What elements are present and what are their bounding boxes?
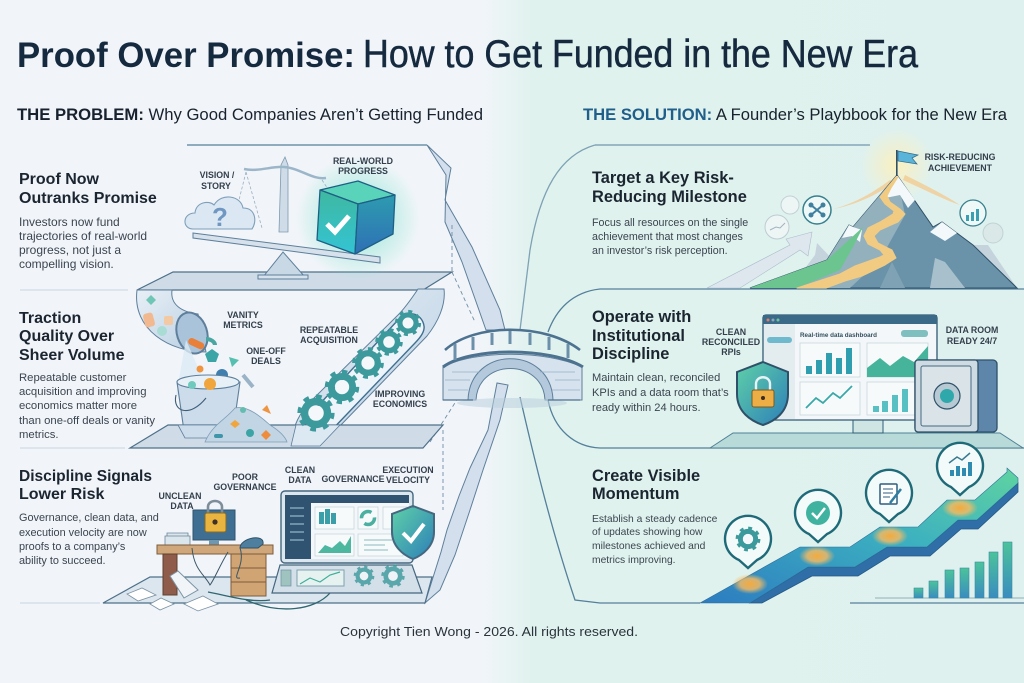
illustration: clean laptop dashboard: DATA: [288, 475, 312, 485]
panel text: discipline signals: Discipline Signals: [19, 468, 152, 485]
panel text: traction quality: Quality Over: [19, 328, 114, 345]
illustration: balance scale: VISION /: [200, 170, 235, 180]
title: Proof Over Promise:: [17, 36, 355, 75]
panel text: discipline signals: proofs to a company’s: [19, 541, 126, 553]
illustration: leaky pipe and bucket: ONE-OFF: [246, 346, 286, 356]
platform 3: [103, 577, 432, 603]
illustration: leaky pipe and bucket: DEALS: [251, 356, 281, 366]
illustration: dashboard and safe: READY 24/7: [947, 336, 997, 346]
panel text: traction quality: economics matter more: [19, 400, 137, 412]
panel text: discipline signals: [19, 468, 159, 567]
panel text: traction quality: Traction: [19, 310, 81, 327]
panel text: proof now outranks promise: [19, 171, 157, 271]
copyright: Copyright Tien Wong - 2026. All rights reserved.: [340, 624, 638, 639]
illustration: clean laptop dashboard: EXECUTION: [382, 465, 434, 475]
panel text: traction quality: [19, 310, 155, 441]
panel text: target a key milestone: an investor’s risk perception.: [592, 245, 728, 257]
illustration: balance scale: [185, 156, 420, 280]
panel text: visible momentum: Momentum: [592, 485, 679, 503]
illustration: conveyor of gears: ECONOMICS: [373, 399, 427, 409]
illustration: conveyor of gears: REPEATABLE: [300, 325, 358, 335]
panel text: traction quality: metrics.: [19, 429, 59, 441]
illustration: balance scale: STORY: [201, 181, 231, 191]
illustration: clean laptop dashboard: [272, 465, 434, 593]
illustration: clean laptop dashboard: GOVERNANCE: [321, 474, 385, 484]
illustration: messy desk: POOR: [232, 472, 259, 482]
panel text: institutional discipline: Maintain clean, reconciled: [592, 372, 720, 384]
panel text: target a key milestone: [592, 169, 748, 257]
panel text: institutional discipline: KPIs and a data room that’s: [592, 387, 729, 399]
illustration: conveyor of gears: ACQUISITION: [300, 335, 358, 345]
panel text: institutional discipline: Operate with: [592, 308, 691, 326]
panel text: proof now outranks promise: Investors now fund: [19, 215, 120, 229]
illustration: mountain milestone: [707, 129, 1017, 288]
frame: right structure: [520, 145, 1024, 603]
illustration: conveyor of gears: IMPROVING: [375, 389, 425, 399]
platform 2 with debris pile: [130, 397, 443, 448]
illustration: balance scale: PROGRESS: [338, 166, 388, 176]
panel text: traction quality: Sheer Volume: [19, 347, 125, 364]
panel text: visible momentum: Create Visible: [592, 467, 700, 485]
panel text: proof now outranks promise: Proof Now: [19, 171, 100, 188]
panel text: traction quality: Repeatable customer: [19, 372, 127, 384]
illustration: leaky pipe and bucket: [137, 290, 286, 438]
panel text: proof now outranks promise: Outranks Promise: [19, 190, 157, 207]
panel text: traction quality: than one-off deals or vanity: [19, 415, 155, 427]
illustration: dashboard and safe: Real-time data dashboard: [800, 332, 877, 339]
illustration: balance scale: REAL-WORLD: [333, 156, 393, 166]
illustration: messy desk: GOVERNANCE: [213, 482, 277, 492]
heading: the problem: THE PROBLEM: Why Good Companies Aren’t Getting Funded: [17, 106, 483, 124]
illustration: conveyor of gears: [290, 289, 444, 446]
illustration: dashboard and safe: DATA ROOM: [946, 325, 998, 335]
illustration: dashboard and safe: [702, 315, 1023, 448]
illustration: dashboard and safe: CLEAN: [716, 327, 746, 337]
illustration: leaky pipe and bucket: VANITY: [227, 310, 259, 320]
panel text: discipline signals: execution velocity are now: [19, 527, 147, 539]
illustration: dashboard and safe: RECONCILED: [702, 337, 760, 347]
illustration: mountain milestone: ACHIEVEMENT: [928, 163, 993, 173]
illustration: messy desk: DATA: [170, 501, 194, 511]
panel text: institutional discipline: ready within 24 hours.: [592, 402, 701, 414]
illustration: clean laptop dashboard: CLEAN: [285, 465, 315, 475]
panel text: institutional discipline: Institutional: [592, 327, 685, 345]
illustration: momentum path: [700, 443, 1024, 603]
illustration: balance scale: ?: [212, 202, 228, 232]
illustration: clean laptop dashboard: VELOCITY: [386, 475, 430, 485]
panel text: discipline signals: Lower Risk: [19, 486, 104, 503]
panel text: proof now outranks promise: progress, not just a: [19, 243, 121, 257]
illustration: messy desk: UNCLEAN: [158, 491, 202, 501]
panel text: discipline signals: Governance, clean data, and: [19, 512, 159, 524]
panel text: visible momentum: Establish a steady cadence: [592, 514, 718, 525]
frame: left structure: [20, 145, 508, 603]
panel text: traction quality: acquisition and improving: [19, 386, 146, 398]
panel text: target a key milestone: Focus all resources on the single: [592, 217, 748, 229]
panel text: visible momentum: milestones achieved and: [592, 541, 706, 552]
title continuation: How to Get Funded in the New Era: [363, 33, 918, 76]
panel text: institutional discipline: Discipline: [592, 345, 669, 363]
illustration: leaky pipe and bucket: METRICS: [223, 320, 263, 330]
panel text: proof now outranks promise: trajectories of real-world: [19, 229, 147, 243]
heading: the solution: THE SOLUTION: A Founder’s Playbbook for the New Era: [583, 106, 1008, 124]
platform 1: [137, 272, 452, 290]
panel text: visible momentum: [592, 467, 718, 566]
panel text: discipline signals: ability to succeed.: [19, 555, 106, 567]
panel text: visible momentum: of updates showing how: [592, 527, 703, 538]
illustration: mountain milestone: RISK-REDUCING: [925, 152, 996, 162]
illustration: messy desk: [127, 472, 330, 611]
illustration: dashboard and safe: RPIs: [721, 347, 741, 357]
panel text: target a key milestone: Reducing Milestone: [592, 188, 747, 206]
panel text: institutional discipline: [592, 308, 729, 414]
panel text: target a key milestone: Target a Key Risk-: [592, 169, 734, 187]
panel text: proof now outranks promise: compelling vision.: [19, 257, 114, 271]
bridge: [443, 330, 583, 408]
panel text: visible momentum: metrics improving.: [592, 555, 676, 566]
panel text: target a key milestone: achievement that most changes: [592, 231, 743, 243]
